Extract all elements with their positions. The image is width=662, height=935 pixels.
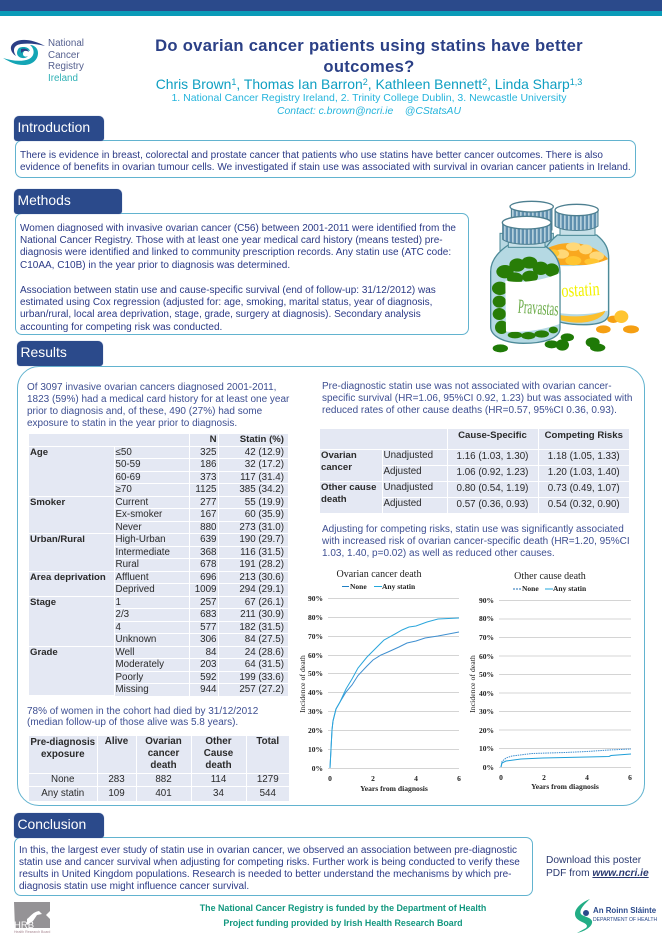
curve: none	[501, 749, 631, 767]
logo: Health Research Board: HRB	[14, 920, 34, 931]
table: cohort characteristics: 696	[200, 572, 216, 582]
table: exposure by outcome: 882	[155, 774, 172, 784]
title: outcomes?	[323, 57, 415, 76]
x axis labels: 0	[328, 774, 332, 783]
legend: Any statin	[382, 582, 416, 591]
table: cohort characteristics: High-Urban	[116, 534, 166, 545]
table: cohort characteristics: Well	[116, 646, 134, 658]
table: cohort characteristics: 2/3	[116, 609, 129, 620]
back bottle	[500, 201, 553, 253]
y axis labels: 20%	[479, 726, 494, 735]
table: cohort characteristics: Statin (%)	[240, 434, 284, 445]
table: cohort characteristics: 199 (33.6)	[239, 672, 284, 682]
table: cohort characteristics: 213 (30.6)	[239, 572, 284, 582]
x axis labels: 4	[585, 773, 589, 782]
logo: National Cancer Registry Ireland	[3, 38, 84, 84]
legend	[342, 582, 416, 591]
methods body	[20, 222, 456, 333]
panel: conclusion text	[14, 837, 533, 896]
table: exposure by outcome: Pre-diagnosis	[30, 737, 95, 748]
table: hazard ratios: 1.16 (1.03, 1.30)	[457, 450, 528, 462]
table: exposure by outcome: Any statin	[41, 788, 84, 799]
y axis labels: 10%	[479, 744, 494, 753]
methods body: accounting for competing risk was conducted.	[20, 322, 222, 333]
results intro text: prior to diagnosis and, of these, 490 (27%) had some	[27, 406, 262, 417]
title: Do ovarian cancer patients using statins have better	[155, 36, 583, 55]
logo: Health Research Board	[14, 902, 50, 934]
table: exposure by outcome: 544	[260, 788, 276, 799]
legend	[513, 584, 587, 593]
y axis labels: 40%	[479, 689, 494, 698]
table: hazard ratios: Adjusted	[384, 466, 422, 476]
methods body: diagnosis were identified and linked to community prescription records. Any statin use (ATC code:	[20, 247, 451, 258]
table: exposure by outcome: 109	[108, 788, 125, 799]
table: cohort characteristics: Moderately	[116, 659, 164, 670]
y axis labels: 40%	[308, 688, 323, 697]
table: exposure by outcome: 401	[155, 788, 172, 799]
methods body: estimated using Cox regression (adjusted for: age, smoking, marital status, year of diagnosis,	[20, 297, 432, 308]
table: cohort characteristics: N	[210, 434, 216, 445]
chart title: Ovarian cancer death	[337, 569, 421, 580]
methods body: Women diagnosed with invasive ovarian cancer (C56) between 2001-2011 were identified from the	[20, 222, 456, 234]
table: exposure by outcome: 283	[108, 774, 125, 784]
affiliations: 1. National Cancer Registry Ireland, 2. Trinity College Dublin, 3. Newcastle University	[171, 92, 567, 104]
green bottle: Pravastas	[517, 296, 559, 321]
x axis labels: 2	[371, 774, 375, 783]
heading: Introduction: Introduction	[18, 119, 90, 135]
y axis labels: 10%	[308, 745, 323, 754]
table: hazard ratios: Cause-Specific	[458, 430, 527, 441]
table: exposure by outcome: Total	[256, 736, 279, 747]
y axis title: Incidence of death	[468, 655, 477, 713]
table: cohort characteristics: Missing	[116, 684, 149, 695]
table: cohort characteristics: 116 (31.5)	[240, 546, 284, 558]
title	[155, 36, 583, 76]
table: cohort characteristics: Never	[116, 522, 142, 532]
y axis labels: 90%	[308, 594, 323, 603]
table: cohort characteristics: 211 (30.9)	[240, 609, 284, 620]
panel: introduction text	[15, 140, 636, 178]
logo: National Cancer Registry Ireland: Ireland	[48, 73, 78, 84]
table: cohort characteristics: 368	[200, 546, 216, 558]
introduction body: evidence of benefits in ovarian tumour cells. We investigated if stain use was associated with survival in ovarian cancer patients in Ireland.	[20, 162, 631, 172]
table: hazard ratios: 0.54 (0.32, 0.90)	[548, 498, 620, 510]
table: cohort characteristics: Ex-smoker	[116, 509, 162, 520]
yellow bottle	[547, 204, 609, 325]
y axis labels: 70%	[308, 632, 323, 641]
table: hazard ratios: Ovarian	[321, 450, 357, 460]
table: cohort characteristics: Deprived	[116, 584, 155, 595]
text: competing risks: Adjusting for competing risks, statin use was significantly associated	[322, 524, 624, 535]
panel: methods text	[15, 213, 469, 335]
table: cohort characteristics: 577	[200, 622, 216, 632]
panel: results	[17, 366, 645, 806]
conclusion body: diagnosis statin use might influence cancer survival.	[19, 880, 249, 892]
table: hazard ratios: Other cause	[321, 482, 376, 492]
curve: none	[330, 632, 459, 768]
table: cohort characteristics: 191 (28.2)	[239, 559, 284, 570]
text: no association: specific survival (HR=1.06, 95%CI 0.92, 1.23) but was associated with	[322, 393, 632, 404]
funding statement	[200, 903, 486, 928]
x axis labels: 4	[414, 774, 418, 783]
conclusion body: statin use and cancer survival when adjusting for competing risks. Further work is being conducted to verify these	[19, 856, 520, 868]
table: cohort characteristics: 277	[200, 496, 216, 508]
table: exposure by outcome: exposure	[41, 749, 85, 760]
table: cohort characteristics: 257	[200, 596, 216, 608]
table: cohort characteristics: ≥70	[116, 484, 132, 495]
table: cohort characteristics: 294 (29.1)	[239, 584, 284, 595]
text: no association: reduced rates of other cause deaths (HR=0.57, 95%CI 0.36, 0.93).	[322, 405, 617, 416]
logo: Department of Health: An Roinn Sláinte	[593, 906, 656, 915]
table: cohort characteristics: Current	[116, 496, 148, 508]
results intro text: 1823 (59%) had a medical card history for at least one year	[27, 394, 289, 405]
heading: Methods: Methods	[18, 192, 71, 208]
table: cohort characteristics: Urban/Rural	[30, 534, 85, 545]
loose tablets	[493, 310, 639, 352]
x axis labels: 6	[628, 773, 632, 782]
results intro text: exposure to statin in the year prior to diagnosis.	[27, 418, 237, 429]
table: cohort characteristics: 639	[200, 534, 216, 545]
table: hazard ratios: 1.06 (0.92, 1.23)	[457, 466, 528, 478]
chart title: Other cause death	[514, 571, 586, 582]
logo: Health Research Board: Health Research Board	[14, 930, 50, 934]
text: competing risks: 1.03, 1.40, p=0.02) as well as reduced other causes.	[322, 548, 555, 559]
y axis labels: 30%	[479, 707, 494, 716]
legend: None	[350, 582, 367, 591]
table: cohort characteristics: 182 (31.5)	[239, 622, 284, 632]
download note: Download this poster	[546, 855, 641, 866]
yellow bottle: ostatin	[561, 279, 600, 302]
table: cohort characteristics: 67 (26.1)	[245, 596, 284, 608]
table: cohort characteristics: 203	[200, 659, 216, 670]
table: hazard ratios	[320, 429, 629, 513]
table: cohort characteristics: 84	[206, 646, 216, 658]
heading: Results: Results	[20, 344, 67, 360]
x axis title: Years from diagnosis	[531, 782, 599, 791]
y axis labels	[479, 596, 494, 772]
table: cohort characteristics: 84 (27.5)	[245, 634, 284, 645]
x axis labels: 0	[499, 773, 503, 782]
methods body: Association between statin use and cause-specific survival (end of follow-up: 31/12/2012) was	[20, 285, 436, 296]
table: cohort characteristics: 944	[200, 684, 216, 695]
table: hazard ratios: Competing Risks	[545, 430, 623, 441]
table: cohort characteristics: 117 (31.4)	[240, 472, 284, 482]
y axis labels: 0%	[312, 764, 323, 773]
table: hazard ratios: 1.18 (1.05, 1.33)	[548, 450, 620, 462]
introduction body	[20, 150, 631, 172]
text: deaths in cohort	[27, 706, 258, 728]
table: hazard ratios: cancer	[321, 462, 352, 472]
y axis title: Incidence of death	[298, 655, 307, 713]
table: hazard ratios: Unadjusted	[384, 450, 433, 460]
table: cohort characteristics: 678	[200, 559, 216, 570]
table: exposure by outcome: 34	[213, 788, 224, 799]
text: competing risks	[322, 524, 630, 559]
conclusion body: In this, the largest ever study of statin use in ovarian cancer, we observed an association between pre-diagnostic	[19, 844, 517, 856]
table: cohort characteristics: 4	[116, 622, 121, 632]
table: exposure by outcome: None	[51, 774, 74, 784]
green bottle	[491, 216, 560, 343]
y axis labels: 50%	[308, 669, 323, 678]
table: hazard ratios: 0.57 (0.36, 0.93)	[457, 498, 528, 510]
y axis labels	[308, 594, 323, 773]
table: cohort characteristics: 880	[200, 522, 216, 532]
legend: Any statin	[553, 584, 587, 593]
introduction body: There is evidence in breast, colorectal and prostate cancer that patients who use statins have better cancer outcomes. There is also	[20, 150, 603, 160]
table: cohort characteristics: 60 (35.9)	[245, 509, 284, 520]
x axis labels: 6	[457, 774, 461, 783]
table: cohort characteristics: 1009	[195, 584, 216, 595]
table: cohort characteristics: 373	[200, 472, 216, 482]
logo: National Cancer Registry Ireland: Cancer	[48, 50, 80, 61]
curve: any statin	[501, 754, 631, 767]
download note: PDF from www.ncri.ie	[546, 868, 649, 879]
table: exposure by outcome: Ovarian	[145, 736, 182, 747]
heading: Methods	[14, 189, 122, 214]
y axis labels: 80%	[308, 613, 323, 622]
table: hazard ratios: Unadjusted	[384, 482, 433, 492]
results intro text: Of 3097 invasive ovarian cancers diagnosed 2001-2011,	[27, 382, 276, 392]
text: deaths in cohort: 78% of women in the cohort had died by 31/12/2012	[27, 706, 258, 717]
authors: Chris Brown1, Thomas Ian Barron2, Kathleen Bennett2, Linda Sharp1,3	[156, 76, 582, 92]
table: exposure by outcome: cancer	[148, 748, 179, 759]
heading: Conclusion	[14, 813, 104, 838]
table: cohort characteristics: 1125	[195, 484, 216, 495]
logo: National Cancer Registry Ireland: Registry	[48, 61, 84, 72]
table: cohort characteristics: 50-59	[116, 459, 141, 470]
table: cohort characteristics: 55 (19.9)	[245, 496, 284, 508]
conclusion body: results in United Kingdom populations. Research is needed to better understand the mechanisms by which pre-	[19, 868, 512, 880]
y axis labels: 70%	[479, 633, 494, 642]
table: hazard ratios: 0.73 (0.49, 1.07)	[548, 482, 620, 494]
table: cohort characteristics: ≤50	[116, 446, 132, 458]
text: competing risks: with increased risk of ovarian cancer-specific death (HR=1.20, 95%CI	[322, 536, 630, 547]
heading: Introduction	[14, 116, 104, 141]
table: cohort characteristics: Poorly	[116, 672, 143, 682]
conclusion body	[19, 844, 520, 892]
logo: Department of Health	[575, 899, 657, 933]
y axis labels: 80%	[479, 614, 494, 623]
table: hazard ratios: death	[321, 494, 347, 504]
table: hazard ratios: 0.80 (0.54, 1.19)	[457, 482, 528, 494]
x axis labels: 2	[542, 773, 546, 782]
contact: Contact: c.brown@ncri.ie @CStatsAU	[277, 106, 461, 117]
table: cohort characteristics: 306	[200, 634, 216, 645]
table: cohort characteristics: 683	[200, 609, 216, 620]
x axis labels	[499, 773, 632, 782]
table: cohort characteristics: Area deprivation	[30, 572, 106, 582]
text: no association: Pre-diagnostic statin use was not associated with ovarian cancer-	[322, 381, 612, 392]
table: cohort characteristics: 186	[200, 459, 216, 470]
y axis labels: 0%	[483, 763, 494, 772]
y axis labels: 50%	[479, 670, 494, 679]
table: cohort characteristics: 190 (29.7)	[239, 534, 284, 545]
table: exposure by outcome: Other	[205, 736, 232, 747]
table: cohort characteristics: Smoker	[30, 496, 65, 508]
table: cohort characteristics: 60-69	[116, 472, 141, 482]
table: cohort characteristics: 257 (27.2)	[239, 684, 284, 695]
download note	[546, 855, 649, 879]
table: cohort characteristics: 1	[116, 596, 121, 608]
chart: other cause death	[468, 571, 632, 791]
methods body: National Cancer Registry. Those with at least one year medical card history (means tested) pre-	[20, 235, 443, 246]
text: no association	[322, 381, 632, 416]
table: exposure by outcome	[29, 736, 289, 801]
table: cohort characteristics: 385 (34.2)	[239, 484, 284, 495]
y axis labels: 20%	[308, 726, 323, 735]
table: cohort characteristics: 325	[200, 446, 216, 458]
table: hazard ratios: Adjusted	[384, 498, 422, 508]
table: exposure by outcome: 114	[211, 774, 226, 784]
table: cohort characteristics: 592	[200, 672, 216, 682]
table: cohort characteristics: 64 (31.5)	[245, 659, 284, 670]
results intro text	[27, 382, 290, 429]
logo: Department of Health: DEPARTMENT OF HEALTH	[593, 916, 657, 922]
table: cohort characteristics: Age	[30, 446, 48, 458]
y axis labels: 60%	[308, 651, 323, 660]
table: cohort characteristics: 167	[200, 509, 216, 520]
table: cohort characteristics: 32 (17.2)	[245, 459, 284, 470]
table: cohort characteristics: Intermediate	[116, 546, 170, 558]
table: cohort characteristics: Stage	[30, 596, 56, 608]
table: cohort characteristics: 24 (28.6)	[245, 646, 284, 658]
funding statement: Project funding provided by Irish Health Research Board	[223, 918, 463, 928]
table: cohort characteristics: Unknown	[116, 634, 156, 645]
funding statement: The National Cancer Registry is funded by the Department of Health	[200, 903, 486, 913]
legend: None	[522, 584, 539, 593]
text: deaths in cohort: (median follow-up of those alive was 5.8 years).	[27, 717, 238, 728]
table: exposure by outcome: death	[150, 760, 177, 771]
table: cohort characteristics: 42 (12.9)	[245, 446, 284, 458]
chart: ovarian cancer death	[298, 569, 461, 793]
table: exposure by outcome: death	[205, 760, 232, 771]
table: cohort characteristics	[29, 434, 288, 696]
top banner	[0, 0, 662, 16]
logo: National Cancer Registry Ireland: National	[48, 38, 84, 49]
y axis labels: 30%	[308, 707, 323, 716]
heading: Results	[17, 341, 103, 366]
table: cohort characteristics: Grade	[30, 646, 58, 658]
curve: any statin	[330, 618, 459, 768]
table: exposure by outcome: 1279	[257, 774, 279, 784]
x axis title: Years from diagnosis	[360, 784, 428, 793]
table: exposure by outcome: Alive	[105, 736, 128, 747]
table: exposure by outcome: Cause	[204, 748, 233, 759]
y axis labels: 90%	[479, 596, 494, 605]
methods body: C10AA, C10B) in the year prior to diagnosis was determined.	[20, 260, 290, 271]
table: hazard ratios: 1.20 (1.03, 1.40)	[548, 466, 620, 478]
y axis labels: 60%	[479, 652, 494, 661]
table: cohort characteristics: Affluent	[116, 572, 149, 582]
table: cohort characteristics: 273 (31.0)	[239, 522, 284, 532]
heading: Conclusion: Conclusion	[18, 816, 86, 832]
methods body: urban/rural, local area deprivation, stage, grade, surgery at diagnosis). Secondary analysis	[20, 309, 421, 320]
illustration: statin pill bottles	[490, 200, 639, 352]
x axis labels	[328, 774, 461, 783]
table: cohort characteristics: Rural	[116, 559, 139, 570]
